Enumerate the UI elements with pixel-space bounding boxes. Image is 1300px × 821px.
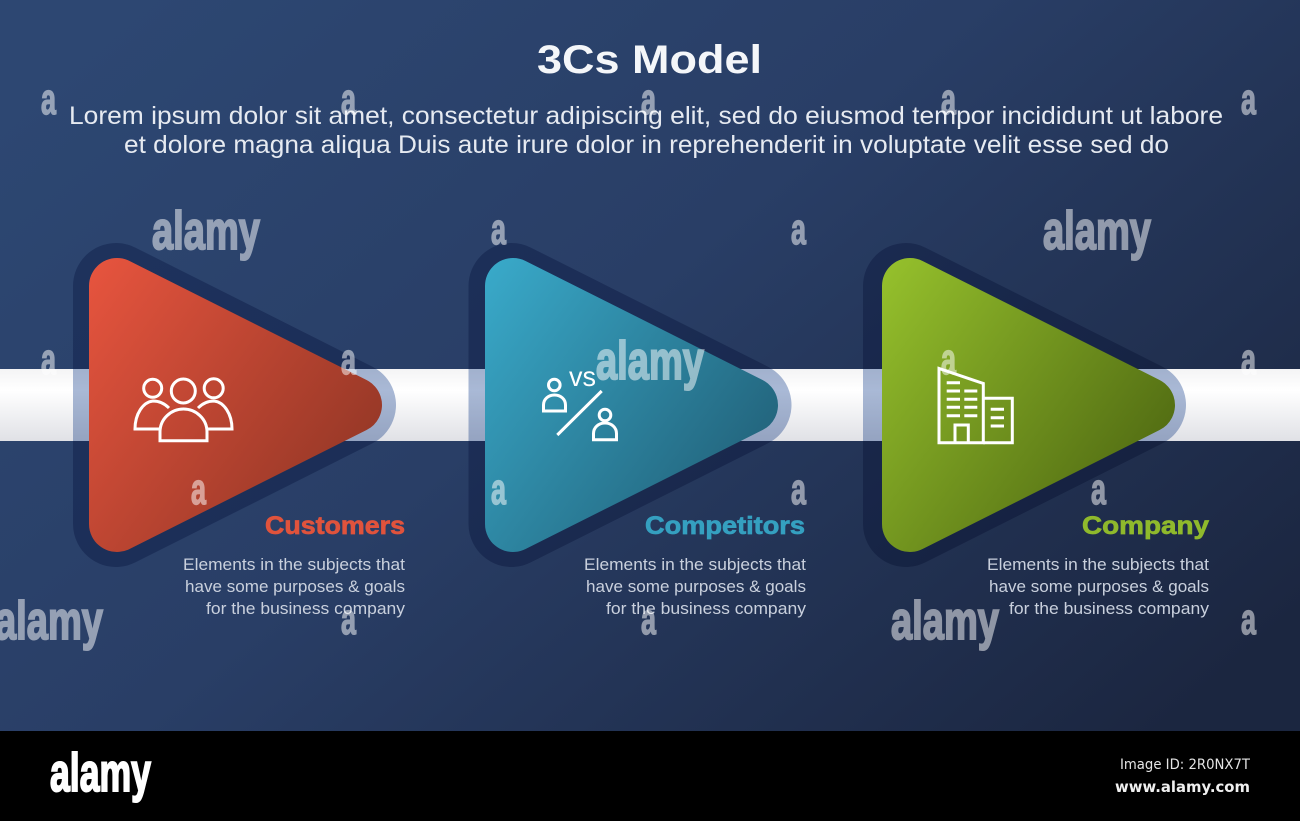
watermark: small marks [41, 75, 1256, 644]
footer url: www.alamy.com [1115, 778, 1250, 796]
intro text: et dolore magna aliqua Duis aute irure dolor in reprehenderit in voluptate velit esse sed do [124, 131, 1169, 159]
watermark: alamy large: alamy [152, 201, 260, 261]
company triangle [910, 286, 1147, 524]
watermark: small marks: a [1091, 465, 1106, 514]
customers triangle halo [116, 286, 353, 524]
panel: company [906, 286, 1210, 618]
intro text: Lorem ipsum dolor sit amet, consectetur adipiscing elit, sed do eiusmod tempor incididunt ut labore [69, 102, 1223, 130]
watermark: small marks: a [1241, 595, 1256, 644]
customers description: have some purposes & goals [185, 577, 405, 596]
customers heading: Customers [265, 512, 405, 540]
watermark: small marks: a [791, 465, 806, 514]
company heading: Company [1082, 512, 1209, 540]
customers triangle [117, 286, 354, 524]
watermark: small marks: a [1241, 75, 1256, 124]
horizontal white band [0, 369, 1300, 441]
watermark: small marks: a [341, 595, 356, 644]
competitors triangle [513, 286, 750, 524]
title: 3Cs Model [537, 38, 762, 82]
watermark: small marks: a [41, 75, 56, 124]
customers description: for the business company [206, 599, 406, 618]
watermark: small marks: a [491, 465, 506, 514]
watermark: small marks: a [41, 335, 56, 384]
watermark: small marks: a [941, 335, 956, 384]
watermark: alamy large: alamy [1043, 201, 1151, 261]
watermark: small marks: a [1241, 335, 1256, 384]
company description: have some purposes & goals [989, 577, 1209, 596]
company description: for the business company [1009, 599, 1210, 618]
watermark: small marks: a [641, 75, 656, 124]
panel: customers [116, 286, 406, 618]
watermark: alamy large: alamy [891, 591, 999, 651]
icon: company building [939, 368, 1012, 443]
watermark: small marks: a [491, 205, 506, 254]
customers description [183, 555, 406, 618]
icon: competitors versus [544, 361, 616, 440]
watermark: small marks: a [341, 75, 356, 124]
company description: Elements in the subjects that [987, 555, 1209, 574]
panel: competitors [512, 286, 807, 618]
intro text [69, 102, 1223, 159]
watermark: small marks: a [791, 205, 806, 254]
icon: customers group [135, 379, 232, 441]
icon: competitors versus: vs [569, 361, 596, 392]
competitors triangle halo [512, 286, 748, 524]
watermark: alamy large: alamy [596, 331, 704, 391]
watermark: small marks: a [341, 335, 356, 384]
competitors heading: Competitors [645, 512, 805, 540]
watermark: small marks: a [641, 595, 656, 644]
company description [987, 555, 1210, 618]
watermark: small marks: a [191, 465, 206, 514]
watermark: small marks: a [941, 75, 956, 124]
footer logo: alamy [50, 743, 151, 803]
footer image id: Image ID: 2R0NX7T [1120, 757, 1250, 773]
customers description: Elements in the subjects that [183, 555, 405, 574]
competitors description: Elements in the subjects that [584, 555, 806, 574]
footer bar [0, 731, 1300, 821]
company triangle halo [906, 286, 1143, 524]
competitors description [584, 555, 807, 618]
competitors description: have some purposes & goals [586, 577, 806, 596]
watermarks [0, 75, 1256, 651]
competitors description: for the business company [606, 599, 807, 618]
